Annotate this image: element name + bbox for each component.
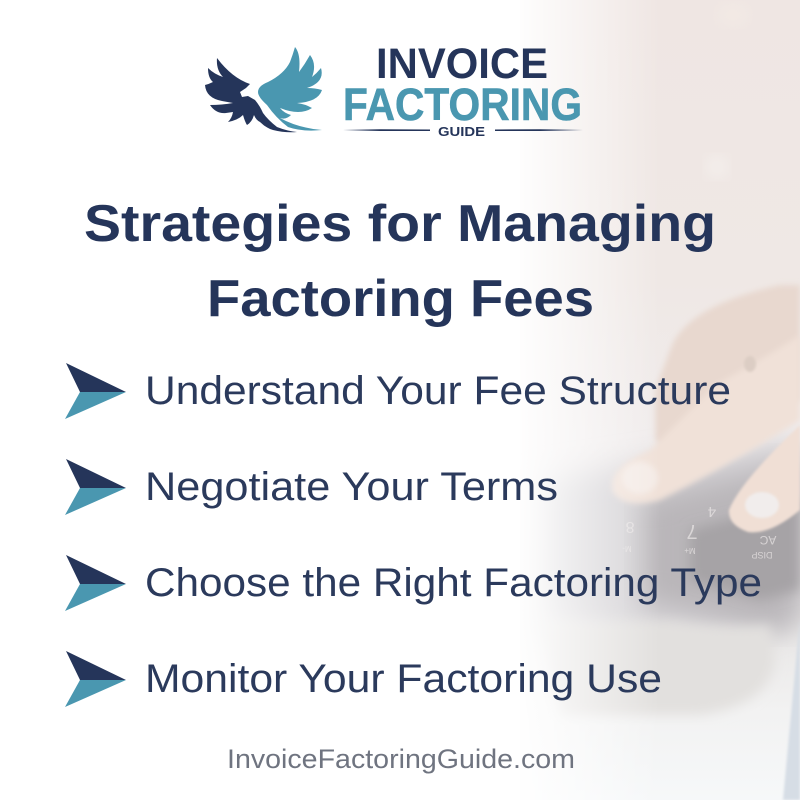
list item 3: [65, 555, 762, 611]
icon: arrow: [65, 555, 126, 611]
background photo: hand on calculator: M+: [684, 546, 696, 555]
list item 1: [65, 363, 731, 419]
title: Strategies for Managing: [84, 195, 716, 253]
icon: arrow: [65, 459, 126, 515]
logo wordmark: GUIDE: [438, 125, 485, 139]
list item 2: [65, 459, 558, 515]
list item 1: Understand Your Fee Structure: [145, 369, 731, 413]
icon: arrow: [65, 363, 126, 419]
logo wordmark: [343, 40, 583, 139]
background photo: hand on calculator: M-: [622, 544, 632, 553]
icon: arrow: [65, 651, 126, 707]
background photo: hand on calculator: 4: [708, 503, 716, 520]
footer website: InvoiceFactoringGuide.com: [227, 744, 575, 774]
list item 2: Negotiate Your Terms: [145, 465, 558, 509]
background photo: hand on calculator: 8: [625, 518, 634, 535]
logo: [205, 40, 583, 139]
list item 3: Choose the Right Factoring Type: [145, 561, 762, 605]
list item 4: [65, 651, 662, 707]
title: [84, 195, 716, 328]
list item 4: Monitor Your Factoring Use: [145, 657, 662, 701]
background photo: hand on calculator: 7: [686, 520, 698, 542]
logo wordmark: FACTORING: [343, 79, 582, 130]
logo wordmark: INVOICE: [376, 40, 548, 88]
background photo: hand on calculator: AC: [759, 533, 776, 547]
icon: eagle logo: [205, 47, 322, 132]
title: Factoring Fees: [207, 270, 594, 328]
background photo: hand on calculator: DISP: [751, 550, 773, 560]
